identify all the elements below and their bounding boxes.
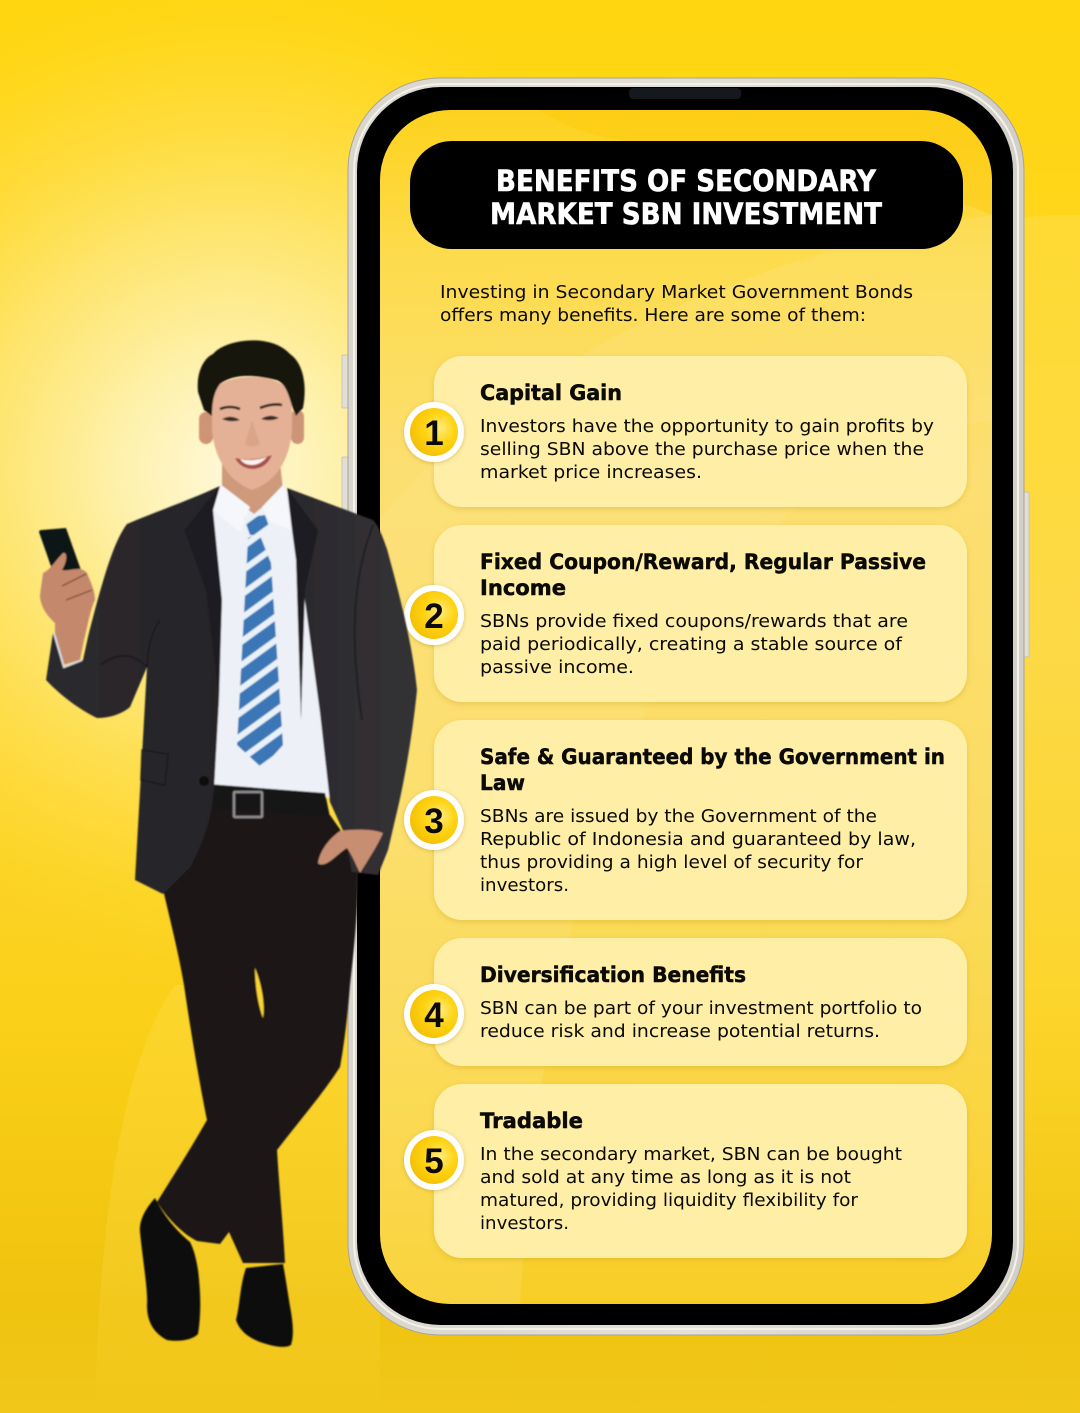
card 2: fixed coupon bbox=[404, 525, 967, 702]
belt bbox=[206, 784, 330, 817]
phone notch bbox=[629, 88, 741, 99]
nose shade bbox=[245, 420, 260, 446]
card 1: capital gain: Investors have the opportunity to gain profits by bbox=[480, 416, 934, 437]
card 2: fixed coupon: passive income. bbox=[480, 657, 634, 678]
phone screen bbox=[380, 110, 992, 1304]
collar bbox=[213, 484, 292, 532]
card 4: diversification: SBN can be part of your investment portfolio to bbox=[480, 998, 922, 1019]
card 5: tradable: investors. bbox=[480, 1213, 569, 1234]
shoe right bbox=[236, 1264, 293, 1347]
businessman illustration bbox=[39, 340, 417, 1347]
card 5: tradable bbox=[404, 1084, 967, 1258]
intro text bbox=[440, 282, 913, 326]
intro text: Investing in Secondary Market Government Bonds bbox=[440, 282, 913, 303]
card 4: diversification: Diversification Benefits bbox=[480, 963, 746, 987]
gap between legs bbox=[255, 968, 264, 1018]
jacket button bbox=[199, 776, 209, 786]
badge 1: 1 bbox=[424, 414, 444, 453]
badge 2: 2 bbox=[424, 597, 444, 636]
card 4: diversification bbox=[404, 938, 967, 1066]
card 1: capital gain: market price increases. bbox=[480, 462, 702, 483]
title banner: MARKET SBN INVESTMENT bbox=[490, 197, 882, 231]
card 1: capital gain: selling SBN above the purchase price when the bbox=[480, 439, 924, 460]
trousers bbox=[157, 808, 358, 1263]
jacket details bbox=[100, 525, 373, 785]
badge 2 bbox=[404, 585, 464, 645]
card 5: tradable: Tradable bbox=[480, 1109, 583, 1133]
badge 4 bbox=[404, 984, 464, 1044]
brows bbox=[220, 404, 282, 409]
badge 1 bbox=[404, 402, 464, 462]
card 2: fixed coupon: Income bbox=[480, 576, 566, 600]
badge 3 bbox=[404, 790, 464, 850]
title banner bbox=[410, 141, 963, 249]
jacket right panel and sleeve bbox=[287, 488, 417, 875]
lapels bbox=[184, 486, 318, 720]
card 2: fixed coupon: Fixed Coupon/Reward, Regular Passive bbox=[480, 550, 926, 574]
raised hand bbox=[40, 553, 95, 665]
eye right bbox=[261, 416, 279, 420]
card 2: fixed coupon: paid periodically, creating a stable source of bbox=[480, 634, 903, 655]
card 3: safe and guaranteed: Safe & Guaranteed by the Government in bbox=[480, 745, 945, 769]
badge 4: 4 bbox=[424, 996, 444, 1035]
mobile phone bbox=[39, 528, 87, 600]
badge 5: 5 bbox=[424, 1142, 444, 1181]
card 3: safe and guaranteed: Republic of Indonesia and guaranteed by law, bbox=[480, 829, 916, 850]
card 1: capital gain: Capital Gain bbox=[480, 381, 622, 405]
pocket hand bbox=[318, 830, 383, 873]
shirt cuff bbox=[54, 633, 82, 667]
card 5: tradable: matured, providing liquidity flexibility for bbox=[480, 1190, 859, 1211]
card 3: safe and guaranteed: Law bbox=[480, 771, 525, 795]
badge 5 bbox=[404, 1130, 464, 1190]
card 3: safe and guaranteed: SBNs are issued by the Government of the bbox=[480, 806, 877, 827]
phone side buttons bbox=[342, 355, 1029, 657]
card 5: tradable: In the secondary market, SBN can be bought bbox=[480, 1144, 902, 1165]
phone frame bbox=[348, 78, 1024, 1335]
card 4: diversification: reduce risk and increase potential returns. bbox=[480, 1021, 880, 1042]
necktie bbox=[237, 515, 283, 768]
card 2: fixed coupon: SBNs provide fixed coupons/rewards that are bbox=[480, 611, 908, 632]
shirt bbox=[205, 486, 340, 798]
card 1: capital gain bbox=[404, 356, 967, 507]
jacket left panel and sleeve bbox=[46, 486, 220, 894]
hair bbox=[198, 340, 305, 416]
card 5: tradable: and sold at any time as long as it is not bbox=[480, 1167, 851, 1188]
intro text: offers many benefits. Here are some of them: bbox=[440, 305, 866, 326]
finger shadows bbox=[62, 574, 92, 600]
shoe left bbox=[140, 1198, 200, 1341]
badge 3: 3 bbox=[424, 802, 444, 841]
card 3: safe and guaranteed bbox=[404, 720, 967, 920]
mouth bbox=[235, 455, 272, 469]
card 3: safe and guaranteed: thus providing a high level of security for bbox=[480, 852, 864, 873]
head bbox=[198, 340, 305, 490]
face bbox=[212, 377, 292, 490]
title banner: BENEFITS OF SECONDARY bbox=[496, 164, 877, 198]
card 3: safe and guaranteed: investors. bbox=[480, 875, 569, 896]
neck bbox=[222, 462, 283, 514]
eye left bbox=[222, 417, 240, 421]
